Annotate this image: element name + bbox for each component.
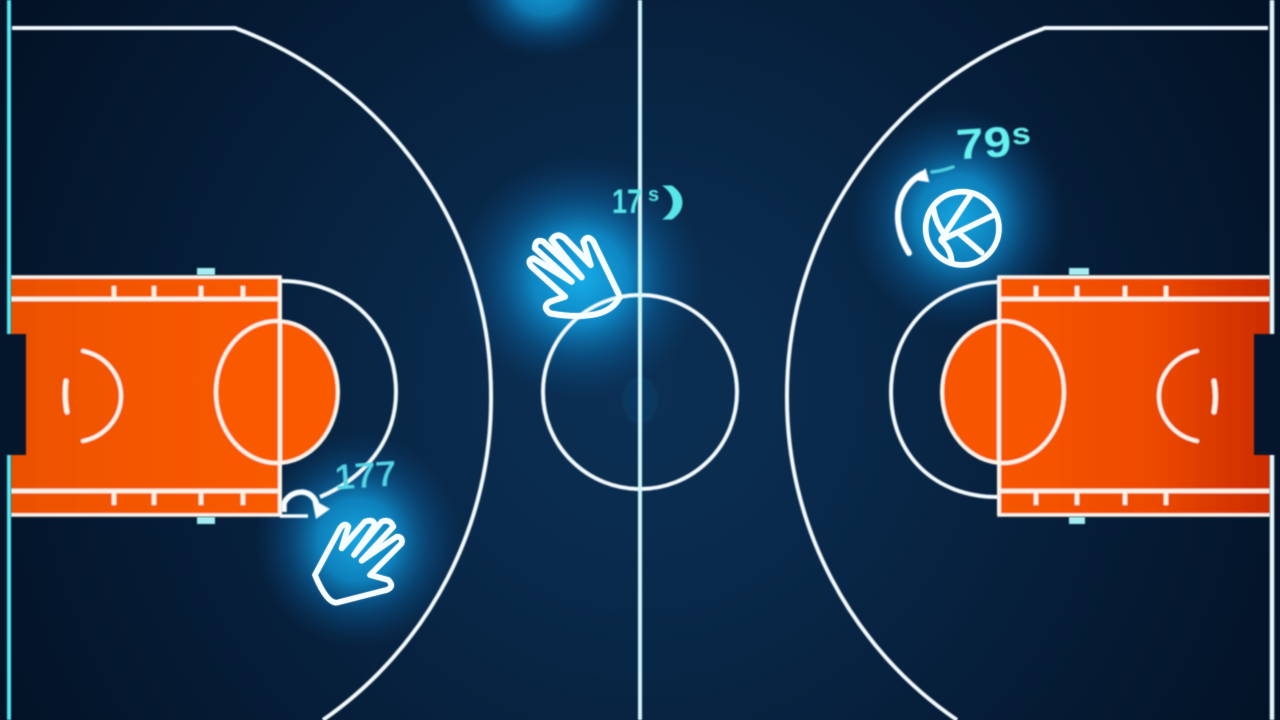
center label: 17 — [612, 183, 642, 221]
label: 177: 177 — [333, 455, 398, 497]
center label: ) — [662, 179, 686, 220]
label: 79s — [955, 115, 1033, 169]
icon: lower hand — [315, 521, 402, 603]
label: 79s: s — [1010, 115, 1032, 152]
label: 79s: 79 — [955, 118, 1013, 169]
icon: basketball — [926, 192, 999, 265]
right key area — [942, 277, 1270, 515]
tick markers — [197, 268, 1089, 524]
center label: s — [648, 184, 659, 206]
arrow with arch — [280, 492, 330, 519]
glow: center hand — [455, 156, 705, 400]
glow: ball — [850, 106, 1066, 330]
glow: top center — [460, 0, 630, 58]
icon: center hand — [530, 235, 620, 316]
timer arc — [898, 167, 953, 253]
glow: center spot — [622, 376, 658, 424]
glow: lower hand — [254, 432, 462, 648]
left key area — [11, 277, 338, 515]
center label — [612, 179, 686, 221]
